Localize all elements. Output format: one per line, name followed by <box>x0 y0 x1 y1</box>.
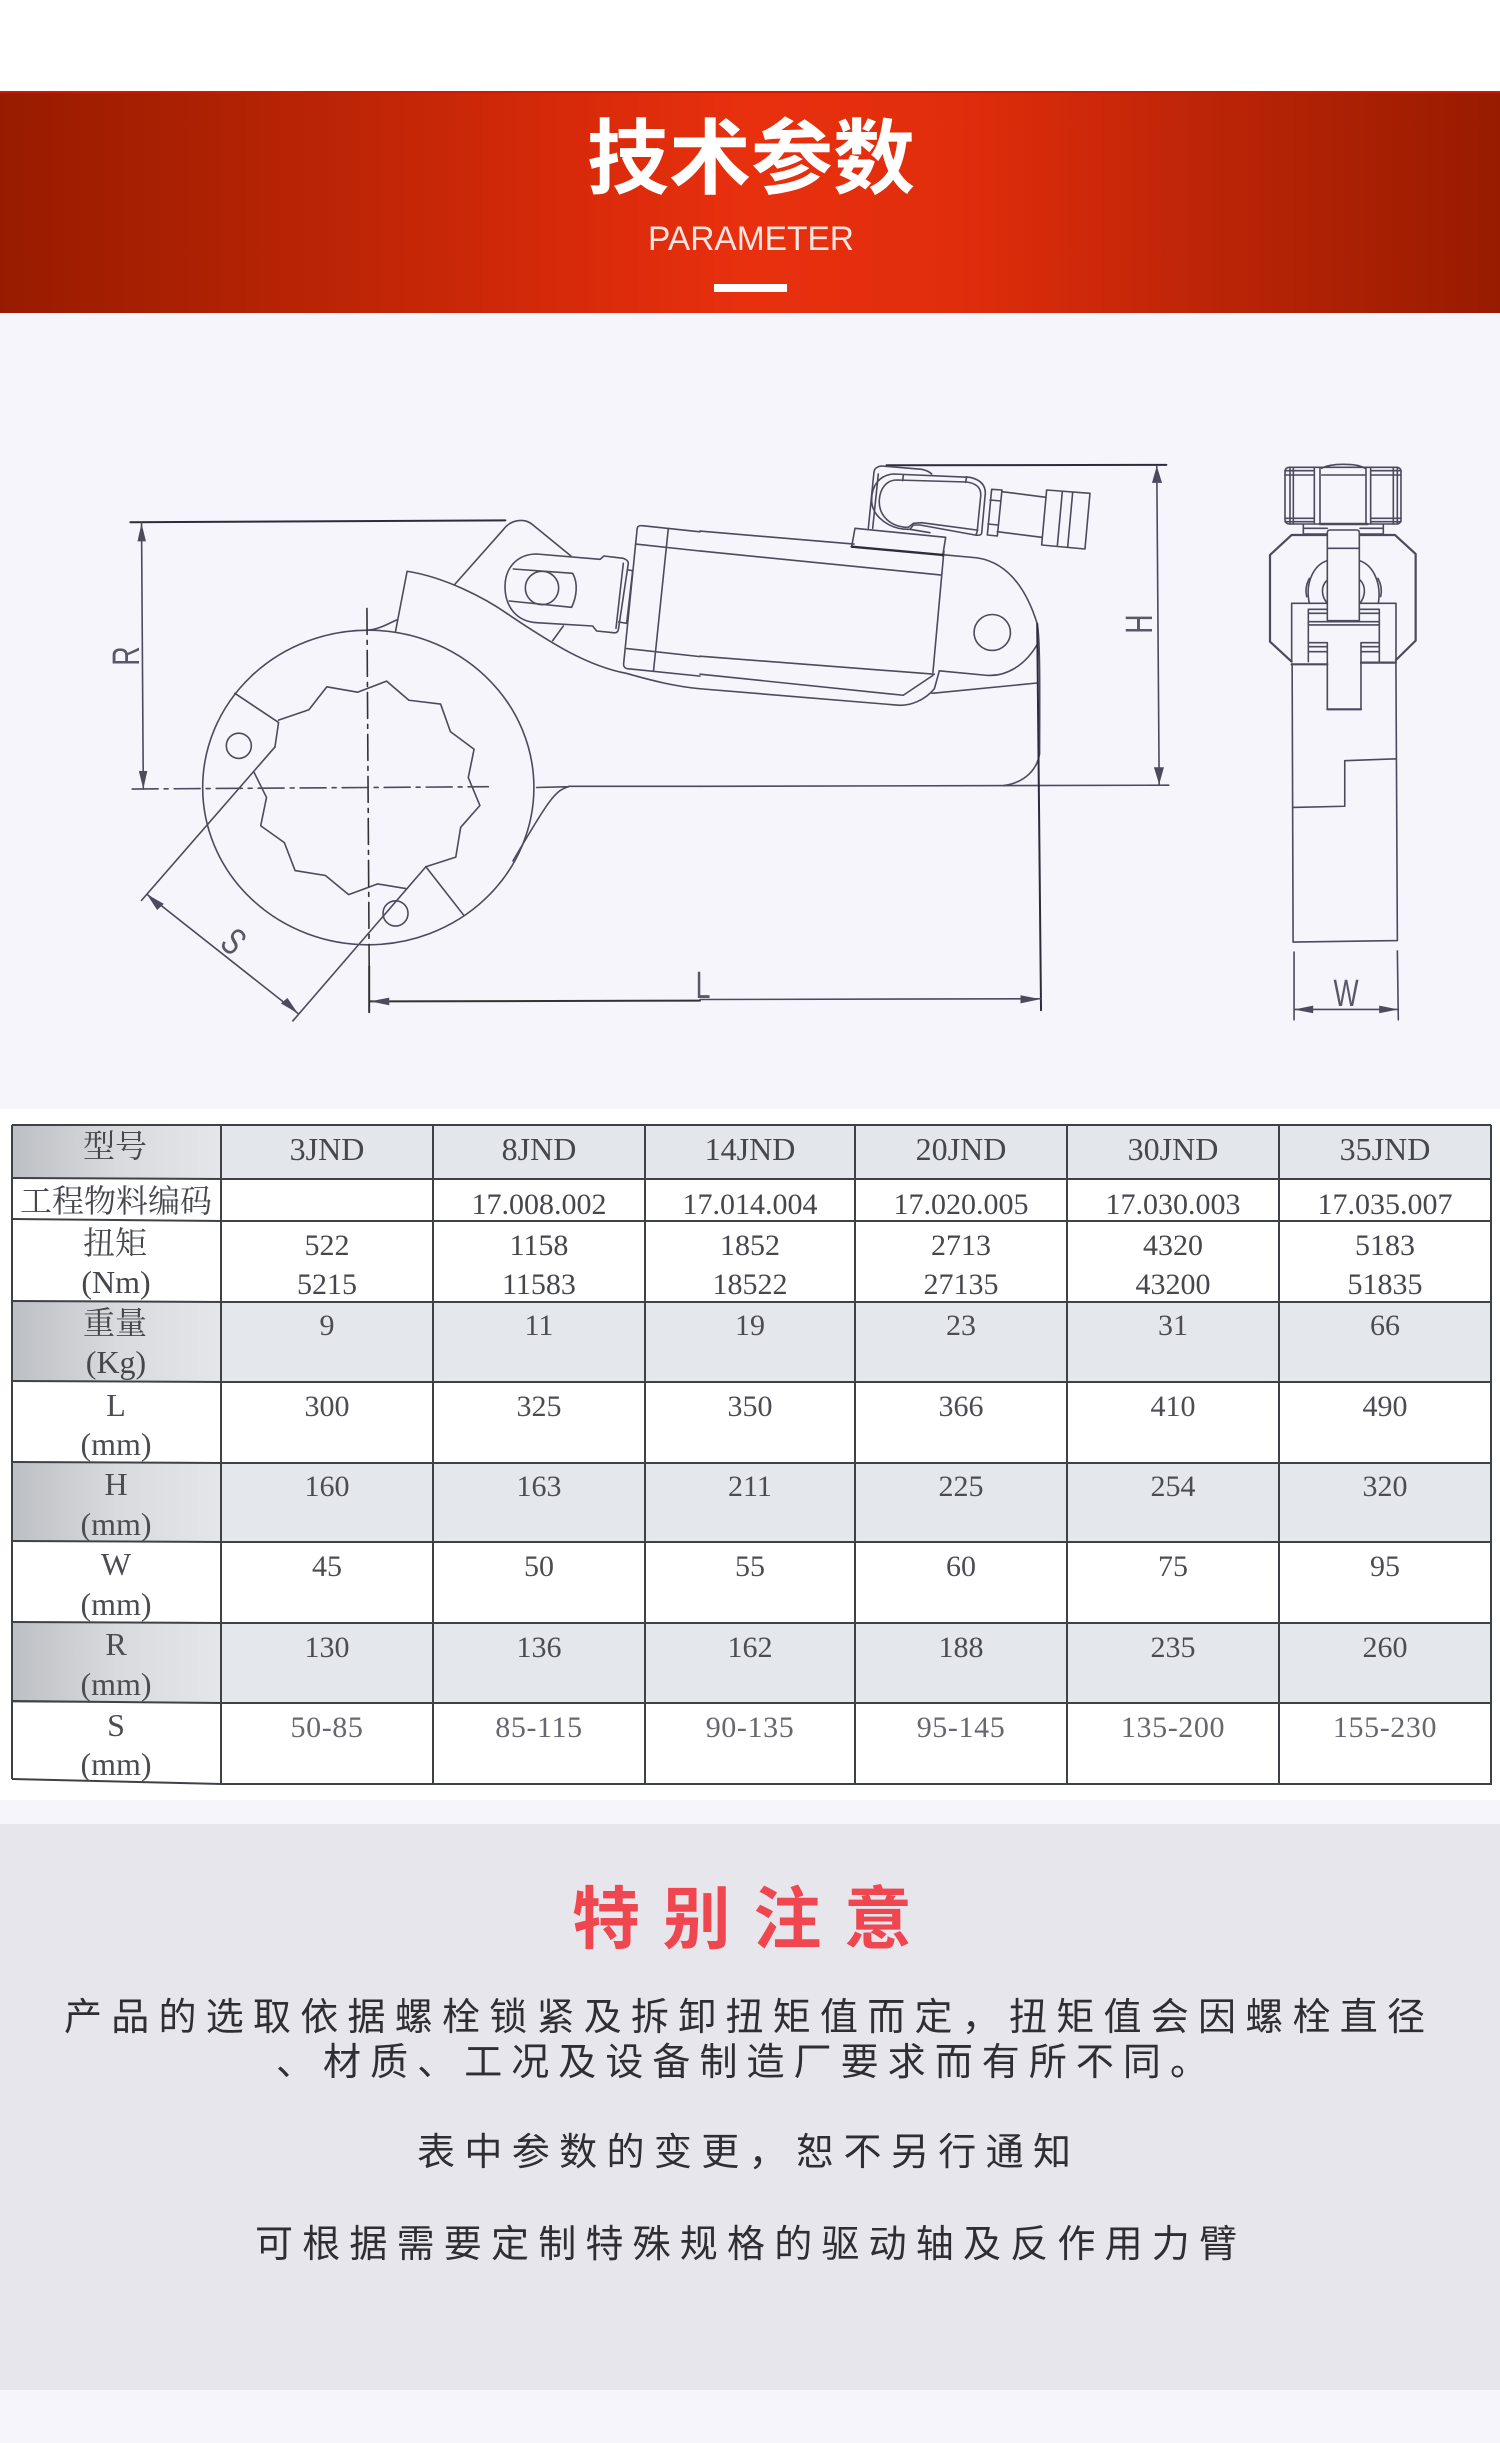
row: W: (mm) <box>80 1586 152 1622</box>
arm and cylinder <box>368 520 700 861</box>
row: weight: 11 <box>525 1309 553 1342</box>
row: material code: 17.008.002 <box>472 1188 606 1221</box>
row: torque: 1158 <box>510 1229 568 1262</box>
row: model: 20JND <box>916 1131 1006 1167</box>
row: R: 130 <box>304 1631 350 1664</box>
banner: technical parameters header <box>0 91 1500 313</box>
notice text: 可根据需要定制特殊规格的驱动轴及反作用力臂 <box>255 2224 1237 2266</box>
row: S: 50-85 <box>290 1711 364 1744</box>
table grid <box>12 1125 1492 1784</box>
label R: R <box>104 646 147 666</box>
row: L: 366 <box>938 1390 984 1423</box>
label S: S <box>213 919 255 963</box>
row: material code: 工程物料编码 <box>20 1183 212 1219</box>
dimension H <box>700 465 1169 786</box>
lever <box>1308 530 1379 709</box>
hydraulic fitting and mounting plate <box>852 466 1090 556</box>
notice text: 表中参数的变更，恕不另行通知 <box>417 2132 1071 2174</box>
row: material code: 17.030.003 <box>1106 1188 1240 1221</box>
row: material code: 17.014.004 <box>682 1188 818 1221</box>
row: model: 14JND <box>705 1131 795 1167</box>
specification table <box>0 1109 1500 1800</box>
row: weight: 重量 <box>83 1305 147 1341</box>
special notice panel <box>0 1824 1500 2390</box>
row: H: 211 <box>728 1470 772 1503</box>
row: S: 90-135 <box>706 1711 794 1744</box>
ring head <box>203 630 534 945</box>
row: R: 260 <box>1362 1631 1408 1664</box>
row: torque: 51835 <box>1348 1268 1422 1301</box>
row: weight: 9 <box>320 1309 334 1342</box>
row: L: 490 <box>1362 1390 1408 1423</box>
row: W: W <box>101 1546 132 1582</box>
table shading <box>12 1125 1491 1703</box>
row: L: 300 <box>304 1390 350 1423</box>
row: weight: 23 <box>946 1309 976 1342</box>
row: weight: (Kg) <box>86 1344 146 1380</box>
body shoulder <box>1292 663 1396 664</box>
subtitle: PARAMETER <box>648 220 854 258</box>
row: L: 410 <box>1150 1390 1196 1423</box>
centre lines <box>132 608 488 966</box>
row: weight: 31 <box>1158 1309 1188 1342</box>
row: H: 160 <box>304 1470 350 1503</box>
row: H: 254 <box>1150 1470 1196 1503</box>
row: L: L <box>106 1387 126 1423</box>
label H: H <box>1117 614 1160 634</box>
row: R: 162 <box>728 1631 772 1664</box>
row: L: 350 <box>728 1390 772 1423</box>
row: W: 50 <box>524 1550 554 1583</box>
row: S: S <box>107 1707 125 1743</box>
row: H: 320 <box>1362 1470 1408 1503</box>
row: material code: 17.035.007 <box>1318 1188 1452 1221</box>
row: H: 225 <box>938 1470 984 1503</box>
row: W: 75 <box>1158 1550 1188 1583</box>
label L: L <box>696 963 710 1006</box>
dimension L left <box>369 966 700 1012</box>
notice text: 产品的选取依据螺栓锁紧及拆卸扭矩值而定，扭矩值会因螺栓直径 <box>64 1997 1425 2039</box>
row: torque: 2713 <box>931 1229 991 1262</box>
row: R <box>80 1626 1408 1702</box>
row: W: 95 <box>1370 1550 1400 1583</box>
row: material code <box>20 1183 1452 1221</box>
body <box>1292 664 1397 942</box>
octagon housing <box>1270 535 1416 662</box>
row: torque: 4320 <box>1143 1229 1203 1262</box>
front view right end <box>700 465 1169 1010</box>
row: S: 135-200 <box>1121 1711 1225 1744</box>
row: S: 85-115 <box>495 1711 583 1744</box>
dimension W <box>1294 951 1398 1020</box>
row: torque: 5215 <box>297 1268 357 1301</box>
dimension L right <box>700 624 1041 1010</box>
row: H <box>80 1466 1408 1542</box>
row: L: 325 <box>516 1390 562 1423</box>
technical drawing panel <box>104 464 1417 1022</box>
row: R: (mm) <box>80 1666 152 1702</box>
front view of wrench <box>130 520 700 1021</box>
row: torque: 43200 <box>1136 1268 1210 1301</box>
notice title: 特别注意 <box>572 1882 912 1958</box>
row: W <box>80 1546 1400 1622</box>
dimension S <box>142 747 426 1021</box>
knob <box>1285 464 1401 534</box>
row: torque: 扭矩 <box>83 1225 147 1261</box>
row: torque: 522 <box>304 1229 350 1262</box>
top white strip <box>0 0 1500 91</box>
row: S: 155-230 <box>1333 1711 1437 1744</box>
row: weight <box>83 1305 1400 1380</box>
row: W: 60 <box>946 1550 976 1583</box>
row: torque: 27135 <box>924 1268 998 1301</box>
row: H: 163 <box>516 1470 562 1503</box>
row: R: 136 <box>516 1631 562 1664</box>
cylinder end and body <box>700 531 1040 786</box>
dimension R <box>130 520 505 789</box>
row: torque: 11583 <box>502 1268 576 1301</box>
row: weight: 19 <box>735 1309 765 1342</box>
row: H: H <box>104 1466 128 1502</box>
row: H: (mm) <box>80 1506 152 1542</box>
row: model <box>83 1128 1430 1167</box>
row: model: 30JND <box>1128 1131 1218 1167</box>
row: torque: 5183 <box>1355 1229 1415 1262</box>
notice text <box>64 1997 1425 2266</box>
row: R: 235 <box>1150 1631 1196 1664</box>
row: W: 45 <box>312 1550 342 1583</box>
white bar accent <box>714 284 787 292</box>
notice text: 、材质、工况及设备制造厂要求而有所不同。 <box>276 2042 1208 2084</box>
row: material code: 17.020.005 <box>894 1188 1028 1221</box>
row: S: 95-145 <box>917 1711 1005 1744</box>
row: R: 188 <box>938 1631 984 1664</box>
row: S <box>80 1707 1437 1782</box>
row: R: R <box>105 1626 127 1662</box>
row: torque: 1852 <box>720 1229 780 1262</box>
row: S: (mm) <box>80 1746 152 1782</box>
side view of wrench <box>1270 464 1416 709</box>
row: weight: 66 <box>1370 1309 1400 1342</box>
title: 技术参数 <box>587 114 915 205</box>
row: model: 35JND <box>1340 1131 1430 1167</box>
row: L: (mm) <box>80 1426 152 1462</box>
label W: W <box>1333 971 1359 1014</box>
row: model: 8JND <box>502 1131 576 1167</box>
row: torque <box>81 1225 1422 1301</box>
row: torque: (Nm) <box>81 1264 151 1300</box>
row: L <box>80 1387 1408 1462</box>
row: model: 3JND <box>290 1131 364 1167</box>
row: model: 型号 <box>83 1128 147 1164</box>
body and W dimension <box>1292 664 1398 1020</box>
clevis joint <box>505 554 633 641</box>
row: W: 55 <box>735 1550 765 1583</box>
row: torque: 18522 <box>712 1268 788 1301</box>
